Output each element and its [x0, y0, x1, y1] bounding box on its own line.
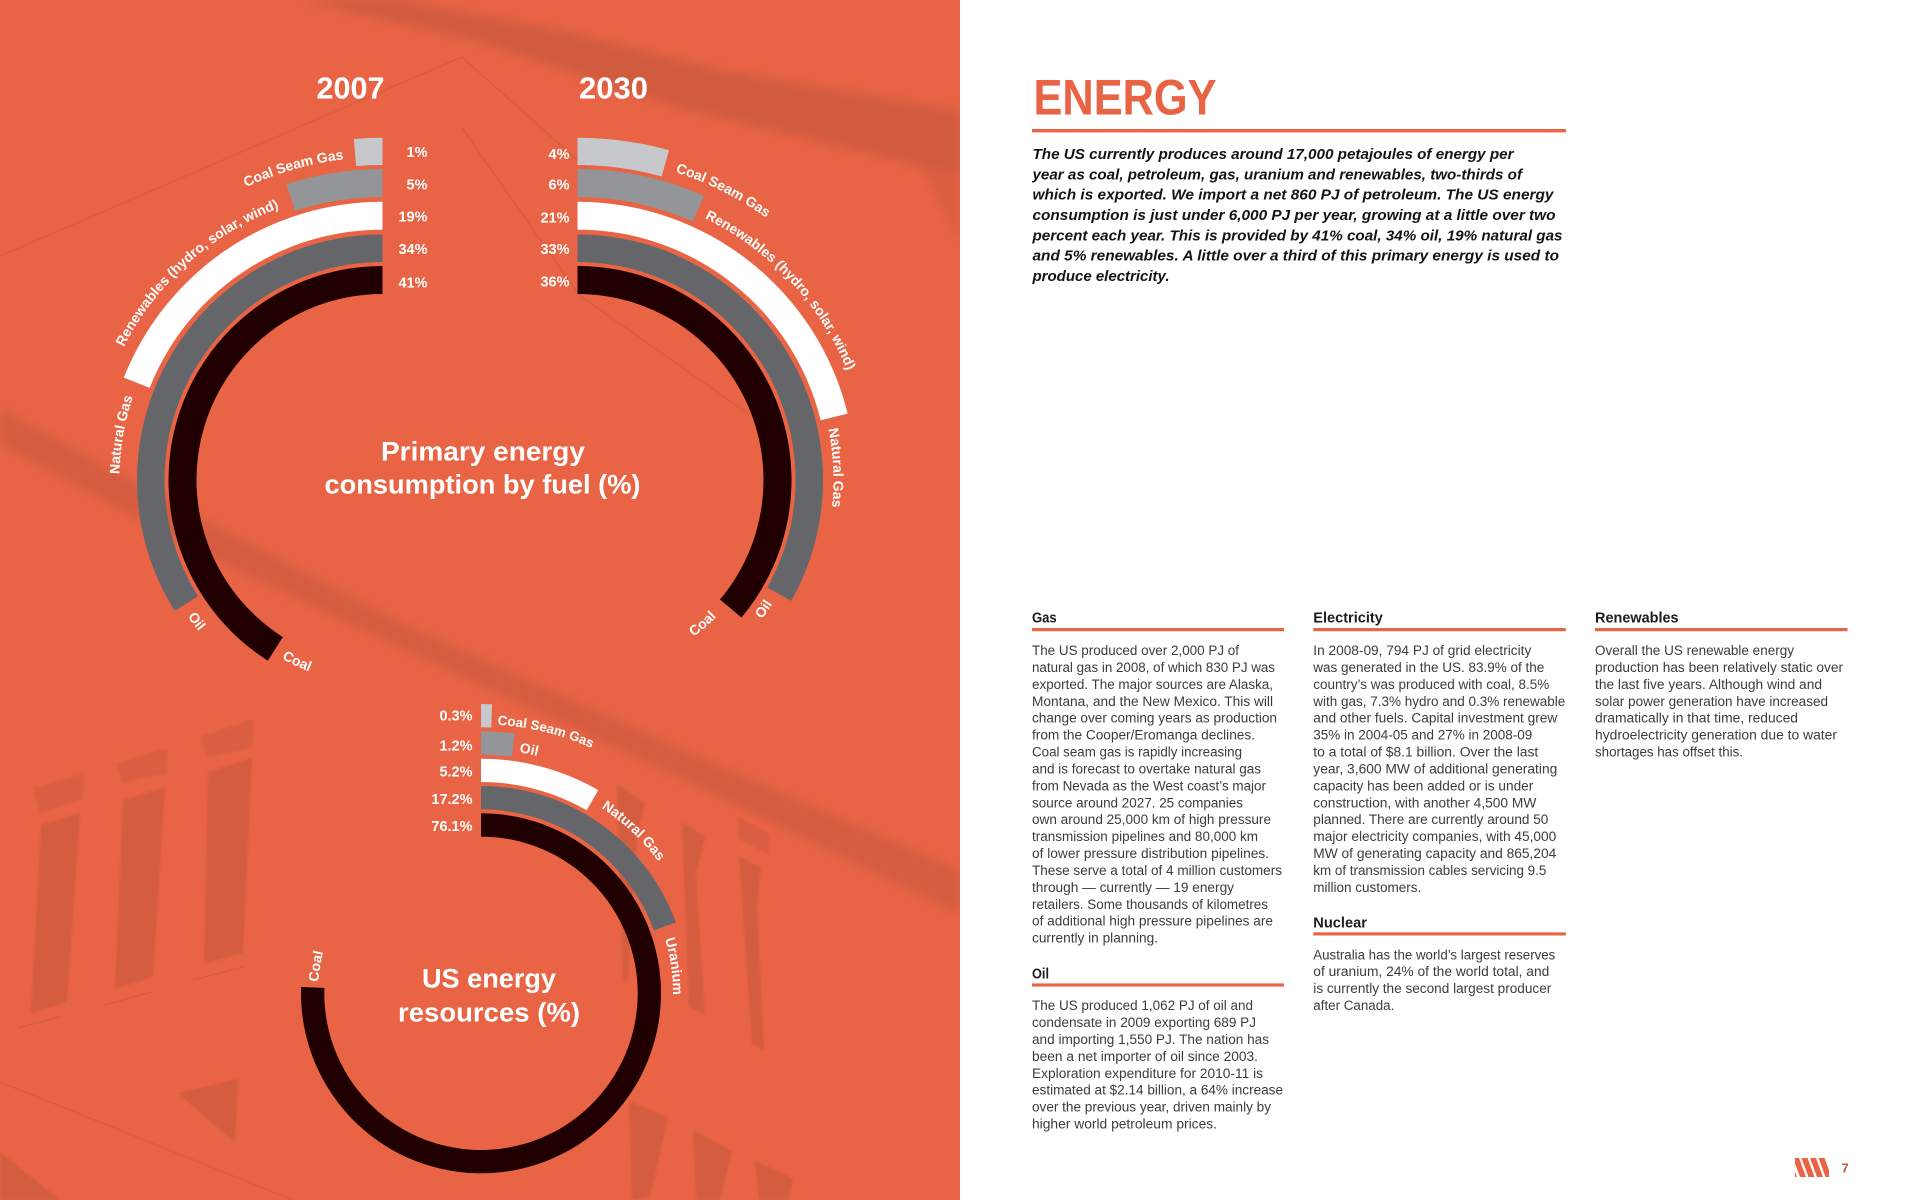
body: Nuclear: after Canada. — [1313, 998, 1394, 1013]
arc: oil 34% — [137, 234, 382, 611]
arc: renewables 6% — [578, 169, 704, 221]
body: Electricity: In 2008-09, 794 PJ of grid electricity — [1313, 643, 1532, 658]
body: Gas: change over coming years as production — [1032, 711, 1277, 726]
label: oil: Oil — [756, 599, 772, 618]
label: uranium: Uranium — [666, 937, 682, 994]
arc: oil 1.2% — [481, 731, 515, 757]
intro paragraph — [1031, 147, 1562, 285]
percentages 2030: 21% — [540, 210, 570, 226]
body: Electricity: planned. There are currently around 50 — [1313, 812, 1548, 827]
intro paragraph: The US currently produces around 17,000 petajoules of energy per — [1032, 147, 1515, 163]
rule: Gas — [1032, 628, 1284, 631]
arc: coal 41% — [168, 266, 382, 661]
body: Electricity: capacity has been added or is under — [1313, 778, 1534, 793]
body: Oil: Exploration expenditure for 2010-11 is — [1032, 1066, 1263, 1081]
body: Electricity: year, 3,600 MW of additional generating — [1313, 761, 1557, 776]
year heading: 2030: 2030 — [579, 70, 648, 106]
body: Gas: These serve a total of 4 million customers — [1032, 863, 1282, 878]
percentages 2030 — [540, 147, 570, 290]
rule: Nuclear — [1313, 932, 1566, 936]
heading: Nuclear: Nuclear — [1313, 915, 1367, 931]
label: coal seam gas: Coal Seam Gas — [244, 152, 343, 186]
percentages resources: 5.2% — [439, 764, 473, 780]
body: Oil: over the previous year, driven mainly by — [1032, 1099, 1271, 1114]
body: Nuclear: is currently the second largest producer — [1313, 981, 1552, 996]
body: Renewables: Overall the US renewable energy — [1595, 643, 1794, 658]
body: Electricity: km of transmission cables servicing 9.5 — [1313, 863, 1546, 878]
chart title: primary energy consumption — [324, 436, 640, 500]
body: Gas: of lower pressure distribution pipelines. — [1032, 846, 1269, 861]
body: Oil: and importing 1,550 PJ. The nation has — [1032, 1032, 1269, 1047]
heading: Renewables: Renewables — [1595, 611, 1679, 627]
body: Renewables — [1595, 643, 1844, 760]
intro paragraph: which is exported. We import a net 860 PJ of petroleum. The US energy — [1032, 188, 1554, 204]
arc: natural gas 19% — [124, 202, 382, 388]
body: Electricity — [1312, 643, 1565, 895]
body: Gas: transmission pipelines and 80,000 km — [1032, 829, 1258, 844]
section: Nuclear — [1313, 915, 1566, 1013]
label: natural gas: Natural Gas — [602, 800, 663, 860]
arc: coal seam gas 4% — [578, 138, 669, 176]
body: Nuclear: of uranium, 24% of the world total, and — [1313, 964, 1549, 979]
body: Electricity: country’s was produced with coal, 8.5% — [1313, 677, 1549, 692]
body: Electricity: million customers. — [1313, 880, 1421, 895]
intro paragraph: and 5% renewables. A little over a third of this primary energy is used to — [1032, 249, 1559, 265]
percentages 2030: 6% — [549, 178, 570, 194]
heading: Gas: Gas — [1032, 611, 1057, 627]
label: renewables: Renewables (hydro, solar, wind) — [116, 200, 278, 346]
label: natural gas: Natural Gas — [828, 428, 844, 507]
arc: natural gas 21% — [578, 202, 848, 420]
percentages resources: 1.2% — [439, 738, 473, 754]
body: Gas: currently in planning. — [1032, 931, 1158, 946]
body: Gas — [1032, 643, 1282, 946]
label: coal seam gas: Coal Seam Gas — [498, 716, 594, 748]
percentages resources: 76.1% — [431, 819, 473, 835]
section: Oil — [1032, 966, 1284, 1131]
body: Gas: through — currently — 19 energy — [1032, 880, 1234, 895]
body: Gas: own around 25,000 km of high pressure — [1032, 812, 1271, 827]
arc: natural gas 5.2% — [481, 759, 598, 810]
percentages 2030: 33% — [540, 242, 570, 258]
percentages 2007: 5% — [407, 178, 428, 194]
body: Oil: higher world petroleum prices. — [1032, 1116, 1217, 1131]
percentages 2030: 36% — [540, 274, 570, 290]
label: coal: Coal — [309, 950, 324, 981]
intro paragraph: consumption is just under 6,000 PJ per year, growing at a little over two — [1032, 208, 1556, 224]
rule: Renewables — [1595, 628, 1848, 631]
body: Gas: Montana, and the New Mexico. This will — [1032, 694, 1273, 709]
icon: striped logo mark — [1795, 1158, 1829, 1177]
label: oil: Oil — [190, 613, 206, 630]
year heading: 2007: 2007 — [316, 70, 384, 106]
body: Renewables: the last five years. Although wind and — [1595, 677, 1822, 692]
arc: oil 33% — [578, 234, 823, 601]
rule: Electricity — [1313, 628, 1566, 631]
body: Gas: retailers. Some thousands of kilometres — [1032, 897, 1268, 912]
percentages 2030: 4% — [549, 147, 570, 163]
label: renewables: Renewables (hydro, solar, wind) — [706, 210, 856, 370]
label: coal: Coal — [284, 652, 312, 672]
heading: Electricity: Electricity — [1313, 611, 1383, 627]
label: oil: Oil — [520, 744, 539, 756]
chart title: primary energy consumption: consumption by fuel (%) — [324, 470, 640, 500]
title rule — [1032, 129, 1566, 132]
body: Nuclear: Australia has the world’s largest reserves — [1313, 947, 1556, 962]
percentages 2007: 19% — [398, 210, 428, 226]
body: Nuclear — [1313, 947, 1556, 1013]
percentages resources: 0.3% — [439, 708, 473, 724]
percentages resources: 17.2% — [431, 792, 473, 808]
label: natural gas: Natural Gas — [110, 396, 132, 474]
body: Gas: The US produced over 2,000 PJ of — [1032, 643, 1239, 658]
intro paragraph: produce electricity. — [1031, 269, 1170, 285]
label: coal: Coal — [690, 610, 716, 635]
chart title: primary energy consumption: Primary energy — [381, 436, 585, 466]
arc: coal seam gas 0.3% — [481, 704, 492, 728]
arc: coal seam gas 1% — [354, 138, 382, 166]
intro paragraph: percent each year. This is provided by 41% coal, 34% oil, 19% natural gas — [1031, 228, 1562, 244]
body: Renewables: solar power generation have increased — [1595, 694, 1828, 709]
body: Renewables: shortages has offset this. — [1595, 744, 1743, 760]
chart title: US energy resources — [398, 964, 580, 1028]
body: Renewables: hydroelectricity generation due to water — [1595, 728, 1838, 743]
body: Gas: natural gas in 2008, of which 830 PJ was — [1032, 660, 1275, 675]
body: Electricity: construction, with another 4,500 MW — [1313, 795, 1537, 810]
page number: 7 — [1842, 1160, 1849, 1176]
body: Oil: estimated at $2.14 billion, a 64% increase — [1032, 1083, 1283, 1098]
body: Gas: from the Cooper/Eromanga declines. — [1032, 728, 1255, 743]
arc: uranium 17.2% — [481, 786, 676, 930]
body: Electricity: with gas, 7.3% hydro and 0.3% renewable — [1312, 694, 1565, 709]
body: Gas: of additional high pressure pipelines are — [1032, 914, 1273, 929]
body: Gas: from Nevada as the West coast’s major — [1032, 778, 1267, 793]
chart: US energy resources arcs — [301, 704, 682, 1174]
chart title: US energy resources: US energy — [422, 964, 556, 994]
body: Gas: source around 2027. 25 companies — [1032, 795, 1243, 810]
body: Oil: The US produced 1,062 PJ of oil and — [1032, 998, 1253, 1013]
chart: 2030 consumption arcs — [540, 138, 856, 635]
body: Gas: and is forecast to overtake natural gas — [1032, 761, 1261, 776]
rule: Oil — [1032, 983, 1284, 987]
body: Gas: Coal seam gas is rapidly increasing — [1032, 744, 1242, 760]
right panel title: ENERGY: ENERGY — [1034, 70, 1216, 126]
body: Oil: condensate in 2009 exporting 689 PJ — [1032, 1015, 1256, 1030]
intro paragraph: year as coal, petroleum, gas, uranium and renewables, two-thirds of — [1031, 167, 1524, 183]
section: Gas — [1032, 611, 1284, 946]
percentages 2007 — [398, 145, 428, 291]
arc: coal 76.1% — [301, 813, 661, 1173]
body: Renewables: production has been relatively static over — [1595, 660, 1844, 675]
body: Electricity: to a total of $8.1 billion. Over the last — [1313, 744, 1539, 760]
body: Electricity: was generated in the US. 83.9% of the — [1312, 660, 1544, 675]
body: Electricity: and other fuels. Capital investment grew — [1313, 711, 1558, 726]
body: Oil — [1032, 998, 1283, 1131]
body: Oil: been a net importer of oil since 2003. — [1032, 1049, 1258, 1064]
left orange panel — [0, 0, 960, 1200]
percentages 2007: 1% — [407, 145, 428, 161]
body: Electricity: 35% in 2004-05 and 27% in 2008-09 — [1313, 728, 1532, 743]
chart title: US energy resources: resources (%) — [398, 998, 580, 1028]
percentages resources — [431, 708, 473, 835]
body: Renewables: dramatically in that time, reduced — [1595, 711, 1798, 726]
body: Electricity: major electricity companies, with 45,000 — [1313, 829, 1556, 844]
percentages 2007: 34% — [398, 242, 428, 258]
body: Electricity: MW of generating capacity and 865,204 — [1313, 846, 1557, 861]
background photo: tinted building — [0, 0, 960, 1200]
label: coal seam gas: Coal Seam Gas — [677, 164, 769, 216]
body: Gas: exported. The major sources are Alaska, — [1032, 677, 1273, 692]
percentages 2007: 41% — [398, 275, 428, 291]
chart: 2007 consumption arcs — [110, 138, 428, 672]
heading: Oil: Oil — [1032, 966, 1049, 982]
arc: coal 36% — [578, 266, 791, 618]
section: Renewables — [1595, 611, 1848, 760]
section: Electricity — [1312, 611, 1566, 895]
arc: renewables 5% — [286, 169, 382, 211]
